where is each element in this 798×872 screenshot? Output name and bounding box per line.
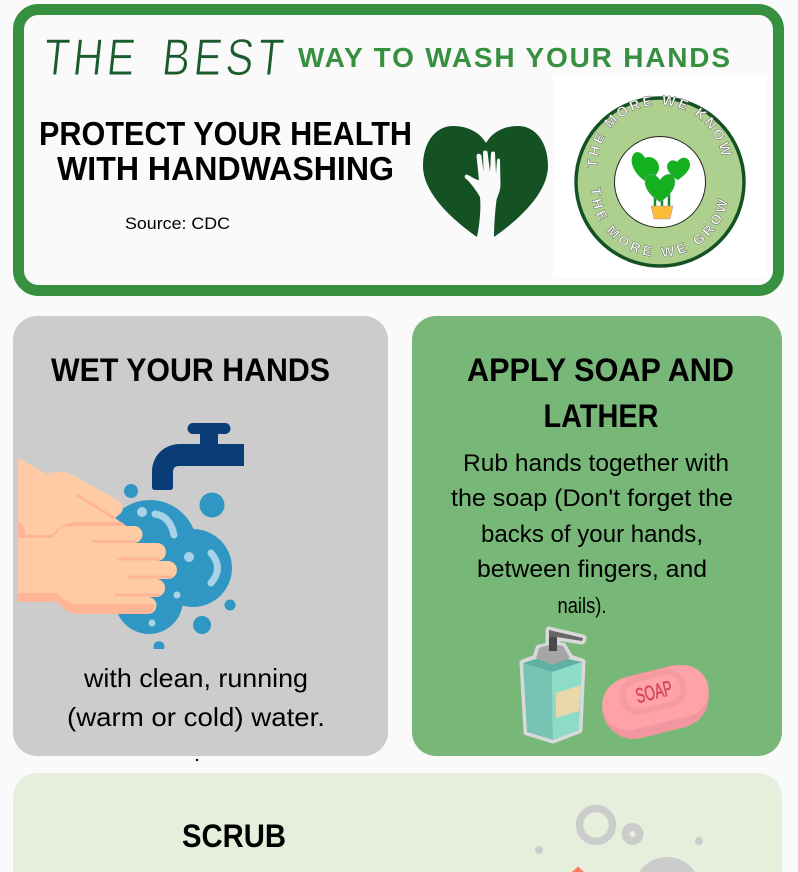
icon: scrub illustration: [535, 808, 703, 872]
heading: apply soap and lather: APPLY SOAP AND: [467, 352, 734, 388]
icon: soap bubbles: [103, 484, 236, 649]
logo: the more we know: THE MORE WE GROW: [590, 186, 728, 258]
body text: with clean running water: [67, 663, 325, 732]
body text: rub hands together: Rub hands together with: [463, 450, 729, 477]
logo: the more we know: [574, 94, 746, 268]
stray dot: [196, 759, 198, 761]
heading: protect your health: [39, 115, 412, 187]
body text: rub hands together: [451, 450, 733, 618]
icon: hands under faucet: [18, 423, 244, 649]
heading: apply soap and lather: [467, 352, 734, 434]
body text: rub hands together: backs of your hands,: [481, 521, 703, 548]
heading: wet your hands: WET YOUR HANDS: [51, 352, 330, 388]
heading: the best: THE BEST: [41, 29, 290, 87]
body text: rub hands together: nails).: [558, 593, 606, 618]
panel: apply soap and lather: [412, 316, 782, 756]
panel: wet your hands: [13, 316, 388, 756]
icon: soap bar: [595, 658, 716, 746]
icon: potted plant: [632, 152, 690, 219]
heading: protect your health: WITH HANDWASHING: [57, 150, 394, 187]
body text: rub hands together: the soap (Don't forget the: [451, 485, 733, 512]
panel: header: [13, 4, 784, 296]
body text: rub hands together: between fingers, and: [477, 556, 707, 583]
body text: with clean running water: (warm or cold) water.: [67, 702, 325, 732]
heading: apply soap and lather: LATHER: [544, 398, 658, 434]
panel: scrub: [13, 773, 782, 872]
body text: with clean running water: with clean, running: [83, 663, 308, 693]
logo: the more we know: THE MORE WE KNOW: [586, 94, 732, 168]
heading: protect your health: PROTECT YOUR HEALTH: [39, 115, 412, 152]
icon: hands: [18, 458, 177, 614]
heading: scrub: SCRUB: [182, 818, 286, 854]
icon: heart with hand: [423, 126, 548, 237]
icon: faucet: [152, 423, 244, 490]
heading: way to wash your hands: WAY TO WASH YOUR HANDS: [298, 42, 730, 73]
icon: soap dispenser: [523, 630, 583, 740]
icon: soap bar: SOAP: [633, 677, 675, 708]
source text: Source: CDC: [125, 214, 230, 233]
